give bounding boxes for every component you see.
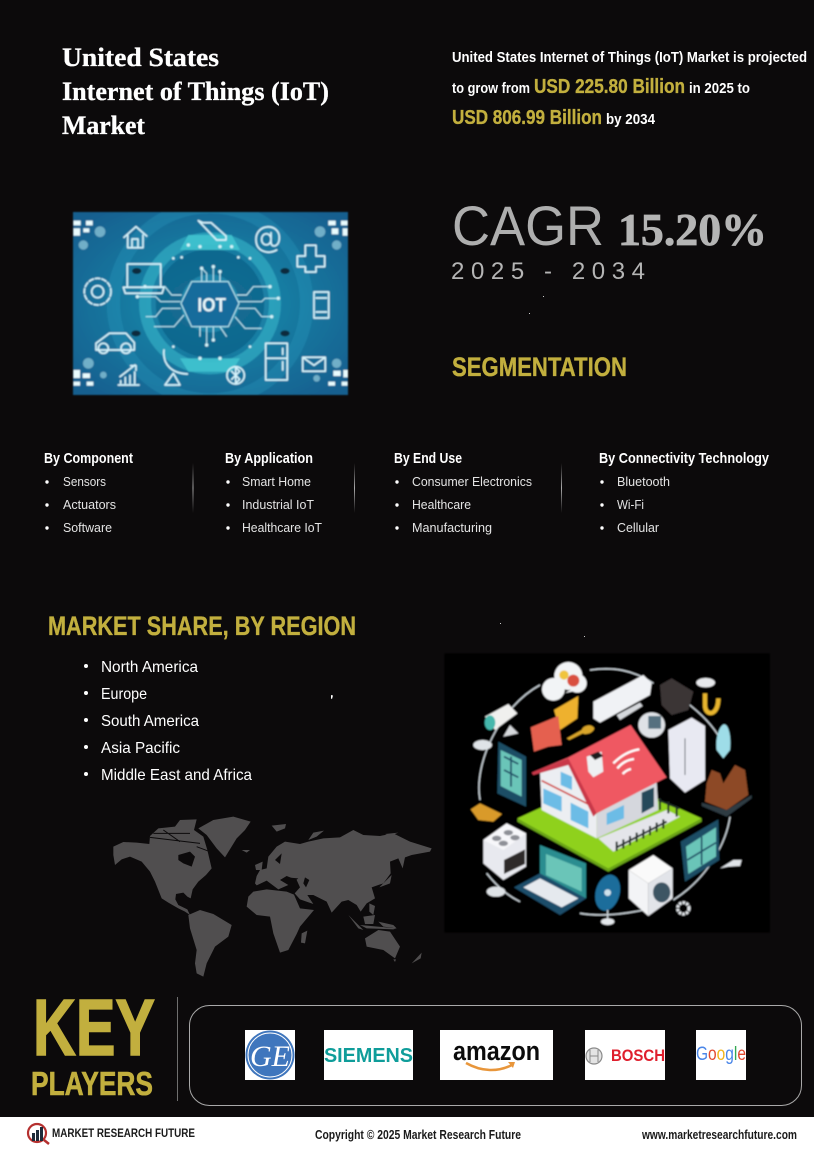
region list: Asia Pacific [101,740,180,757]
title: Internet of Things (IoT) [62,77,329,106]
column: by component: Software [63,520,112,535]
icon: air conditioner [593,675,652,723]
icon: fan [591,872,624,925]
house trim [542,781,590,805]
logo: Bosch [585,1030,665,1080]
icon: oven [483,823,526,880]
logo: Siemens: SIEMENS [324,1045,413,1067]
icon: washing machine [629,855,673,916]
house walls [540,758,597,838]
house windows [543,772,624,828]
column: by connectivity technology: Wi-Fi [617,497,644,512]
region list: Middle East and Africa [101,767,252,784]
market projection text: by 2034 [606,111,656,128]
column: by end use: Consumer Electronics [412,474,532,489]
logo: GE: GE [250,1040,290,1073]
icon: chat bubbles [531,696,578,752]
logo: Google: Google [696,1044,746,1065]
key players heading: KEY [33,983,155,1072]
footer [0,1117,814,1150]
footer brand: MARKET RESEARCH FUTURE [52,1126,195,1140]
world map [113,817,432,977]
icon: house [124,227,147,248]
footer copyright: Copyright © 2025 Market Research Future [315,1128,521,1142]
house side wall [597,782,658,838]
column: by connectivity technology: Bluetooth [617,474,670,489]
icon: envelope [303,357,325,371]
column: by application: Healthcare IoT [242,520,322,535]
key players panel [190,1006,802,1106]
icon: chart [118,365,139,385]
column: by connectivity technology: Cellular [617,520,660,535]
market projection text: USD 225.80 Billion [534,76,685,98]
column: by component [44,450,133,535]
market projection text: in 2025 to [689,80,750,97]
column: by end use [394,450,532,535]
market projection text [452,49,807,129]
icon: smart watch [638,712,665,738]
column: by application: Smart Home [242,474,311,489]
icon: car [96,333,134,350]
icon: left tablet [497,742,526,807]
region list: North America [101,659,198,676]
region list: Europe [101,686,147,703]
icon: fridge [266,343,287,380]
house base platform [598,810,680,852]
region list: South America [101,713,199,730]
column: by application: Industrial IoT [242,497,314,512]
logo: Bosch: BOSCH [611,1046,665,1065]
icon: phone [314,292,329,318]
logo: Google [696,1030,746,1080]
icon: laptop [514,845,586,915]
market projection text: to grow from [452,80,530,97]
icon: coffee machine [660,678,693,715]
icon: laptop [123,264,164,293]
column: by end use: Healthcare [412,497,471,512]
column: by application: By Application [225,450,313,467]
column: by connectivity technology [599,450,770,535]
fences [617,798,679,851]
icon: key [567,725,594,740]
image: IoT circuit board: IOT [197,296,226,317]
icon: horseshoe magnet [705,693,718,713]
icon: fridge [668,718,705,793]
icon: padlocks [471,740,505,897]
icon: power plug [702,765,752,817]
icon: satellite dish [164,350,187,385]
logo: GE [245,1030,295,1080]
icon: security camera [485,704,518,737]
house roof [532,725,667,813]
icon: gear [84,278,111,305]
title: United States [62,43,219,72]
market share heading: MARKET SHARE, BY REGION [48,611,356,641]
market projection text: USD 806.99 Billion [452,107,602,129]
chimney [587,752,603,777]
key players heading: PLAYERS [31,1065,153,1102]
icon: cloud [542,662,587,701]
wifi symbol [613,749,639,774]
column: by end use: Manufacturing [412,520,492,535]
column: by component: Sensors [63,474,106,489]
house lawn [517,777,702,872]
image: IoT circuit board [73,207,348,400]
icon: telephone handset [198,221,226,240]
icon: gear [678,903,689,914]
logo: Amazon [440,1030,553,1080]
icon: small key [720,860,742,868]
title: Market [62,111,145,140]
logo: Siemens [324,1030,413,1080]
CAGR figure: CAGR [452,194,604,257]
roof edge [532,758,597,817]
icon: medical cross [297,245,325,272]
icon: right tablet [681,819,719,882]
column: by application [225,450,322,535]
region list [84,659,252,784]
title [62,43,329,140]
specks [500,296,585,637]
icon: light bulb [716,724,730,758]
icon: magnifier logo [28,1124,49,1144]
image: smart home devices [444,653,770,933]
column: by connectivity technology: By Connectivity Technology [599,450,770,467]
key players heading [31,983,155,1102]
column: by component: Actuators [63,497,116,512]
CAGR figure: 2025 - 2034 [451,258,645,285]
CAGR figure: 15.20% [618,204,767,255]
icon: bluetooth [227,367,244,384]
CAGR figure [451,194,767,285]
logo: Amazon: amazon [453,1036,540,1066]
column: by component: By Component [44,450,133,467]
segmentation heading: SEGMENTATION [452,352,627,382]
column: by end use: By End Use [394,450,462,467]
house door [642,787,654,813]
icon: at sign [256,227,279,252]
house lawn edge [517,818,702,872]
